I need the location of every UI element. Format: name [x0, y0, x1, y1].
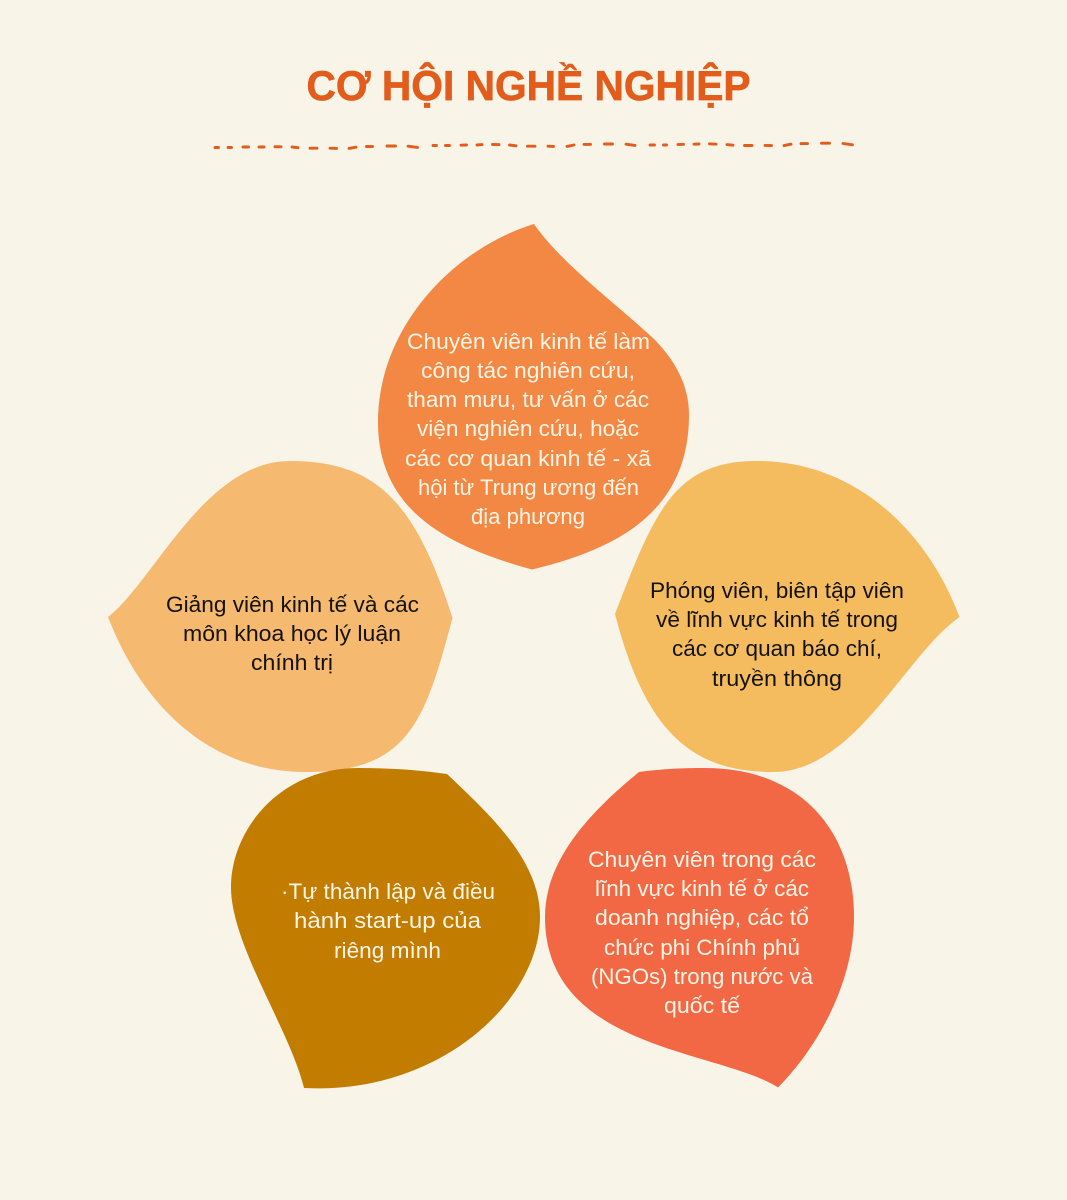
bottom right petal text: quốc tế: [664, 993, 740, 1018]
petal: right, journalist: [615, 461, 960, 772]
top petal text: hội từ Trung ương đến: [418, 475, 639, 500]
bottom right petal text: chức phi Chính phủ: [604, 935, 800, 960]
petal: bottom right, enterprises and NGOs: [545, 768, 854, 1088]
bottom right petal text: [588, 847, 816, 1018]
top petal shape: [378, 224, 689, 570]
bottom right petal text: doanh nghiệp, các tổ: [595, 905, 809, 930]
top petal text: các cơ quan kinh tế - xã: [405, 446, 652, 471]
bottom right petal shape: [545, 768, 854, 1088]
top petal text: tham mưu, tư vấn ở các: [407, 387, 649, 412]
petal: top, economic specialist: [378, 224, 689, 570]
right petal shape: [615, 461, 960, 772]
bottom right petal text: Chuyên viên trong các: [588, 847, 816, 872]
dashed divider: [215, 143, 852, 148]
bottom left petal shape: [231, 768, 540, 1088]
bottom left petal text: hành start-up của: [294, 908, 482, 933]
petal: bottom left, start-up: [231, 768, 540, 1088]
petal: left, lecturer: [108, 461, 452, 772]
top petal text: Chuyên viên kinh tế làm: [407, 329, 650, 354]
left petal shape: [108, 461, 452, 772]
left petal text: Giảng viên kinh tế và các: [166, 592, 419, 617]
title: CƠ HỘI NGHỀ NGHIỆP: [306, 61, 750, 109]
top petal text: [405, 329, 652, 529]
left petal text: chính trị: [251, 650, 333, 675]
left petal text: [166, 592, 419, 675]
right petal text: các cơ quan báo chí,: [672, 636, 882, 661]
right petal text: về lĩnh vực kinh tế trong: [656, 607, 898, 632]
bottom right petal text: (NGOs) trong nước và: [591, 964, 814, 989]
left petal text: môn khoa học lý luận: [183, 621, 401, 646]
bottom left petal text: [281, 879, 495, 963]
right petal text: [650, 578, 904, 691]
bottom right petal text: lĩnh vực kinh tế ở các: [595, 876, 809, 901]
right petal text: truyền thông: [712, 666, 842, 691]
bottom left petal text: riêng mình: [334, 938, 441, 963]
right petal text: Phóng viên, biên tập viên: [650, 578, 904, 603]
top petal text: công tác nghiên cứu,: [421, 358, 635, 383]
top petal text: địa phương: [471, 504, 585, 529]
top petal text: viện nghiên cứu, hoặc: [417, 416, 639, 441]
bottom left petal text: ·Tự thành lập và điều: [281, 879, 495, 904]
